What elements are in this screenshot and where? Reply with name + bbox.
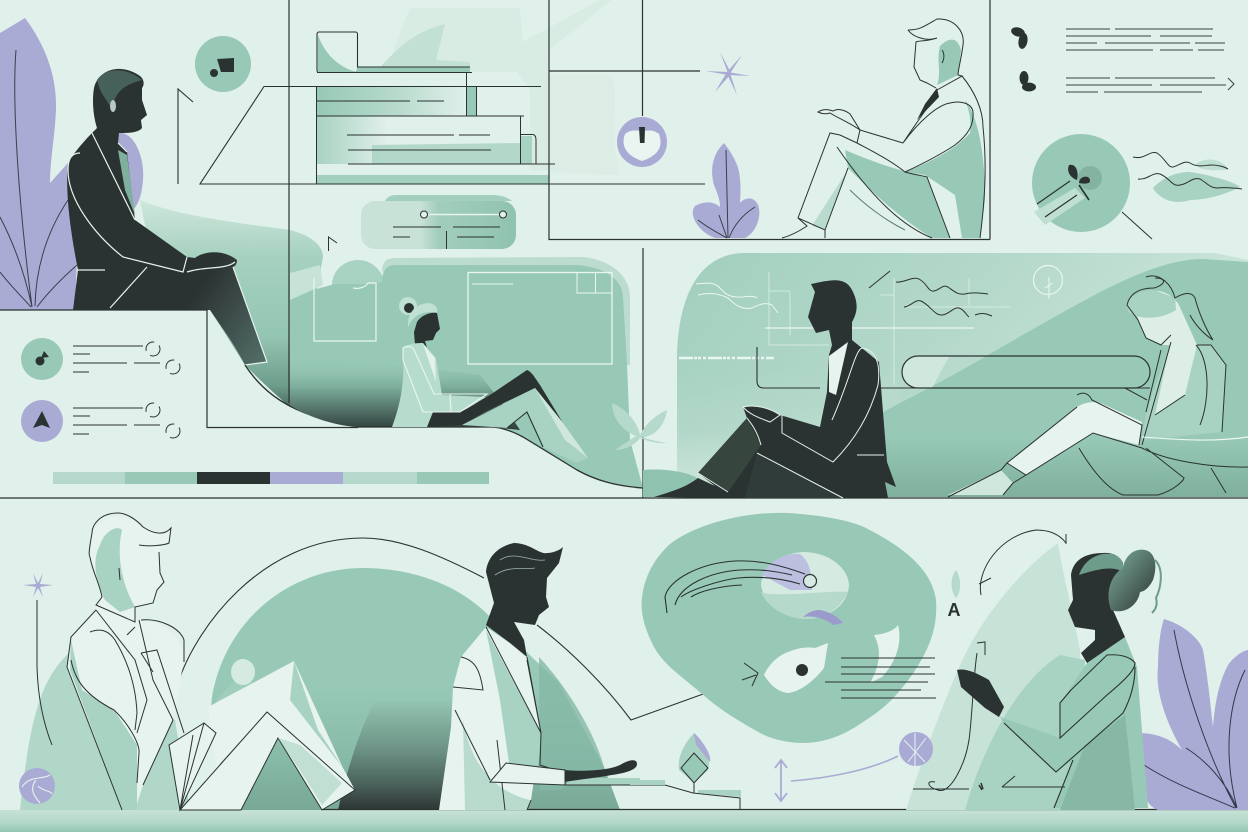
- panel: list rows: [21, 338, 489, 484]
- figure: light man sitting with book: [67, 513, 355, 810]
- icon: lavender plant left: [0, 18, 143, 310]
- wash right of man: [539, 657, 604, 790]
- panel: top right seated man: [782, 19, 985, 238]
- ground curve: [357, 427, 643, 488]
- small dots: [979, 783, 983, 790]
- necktie: [917, 88, 939, 120]
- brushed mint slope: [140, 200, 358, 427]
- colour strip: [53, 472, 489, 484]
- figure: woman sitting: [392, 297, 588, 463]
- icon: mint dot with dark glyph: [195, 36, 251, 92]
- phone arrow line: [913, 642, 1065, 791]
- white waves: [696, 283, 778, 313]
- panel: stacked diagram top centre: [0, 0, 1248, 498]
- figure outline: [782, 19, 985, 238]
- figure: dark seated man: [67, 69, 267, 365]
- letter mark: A: [948, 600, 960, 620]
- figure: woman reading: [948, 276, 1248, 497]
- neck shading: [937, 40, 961, 85]
- icon: star: [706, 52, 750, 95]
- outer arch: [382, 257, 630, 365]
- small flame: [952, 570, 960, 598]
- mint hill: [290, 265, 643, 488]
- dotted signal: [679, 357, 774, 359]
- icon: pendant clock: [617, 117, 667, 167]
- screen panel: [468, 272, 612, 364]
- row two: [21, 400, 180, 442]
- cloud: [332, 260, 384, 300]
- ear mark: [942, 50, 944, 63]
- comet lines: [665, 561, 805, 613]
- dark shadow lower left: [290, 358, 520, 430]
- ground curve: [245, 365, 358, 427]
- panel: top right notes: [1010, 26, 1242, 239]
- dark pool: [338, 700, 470, 810]
- wash stroke: [380, 24, 470, 72]
- text lines: [825, 658, 936, 698]
- icon: compass circle: [1034, 266, 1062, 299]
- left bottom wash: [643, 469, 700, 497]
- panel: bottom centre arc circle: [178, 538, 742, 810]
- base line: [322, 808, 1248, 810]
- brushed wash: [385, 8, 525, 72]
- platform tops: [630, 780, 741, 797]
- row one: [21, 338, 180, 380]
- brushed wash: [906, 543, 1080, 810]
- figure: man in white jacket: [439, 543, 640, 810]
- blob left: [677, 253, 1248, 497]
- mint wash near body: [965, 655, 1085, 810]
- jacket mint shading: [905, 100, 985, 238]
- blob lower fade: [677, 370, 900, 497]
- brush wash: [20, 653, 190, 810]
- lighter edge at left: [290, 265, 323, 300]
- panel: top left seated man: [0, 18, 358, 428]
- icon: mint disc with sprout: [1032, 134, 1152, 239]
- low platform: [565, 785, 740, 810]
- eye shape: [742, 643, 828, 693]
- white flame: [870, 625, 899, 683]
- corner tick: [178, 89, 193, 184]
- icon: dark leaf two: [1020, 71, 1036, 92]
- left window frame: [314, 278, 376, 341]
- big mint circle: [211, 568, 620, 810]
- thigh shading: [845, 150, 950, 238]
- grid lines: [0, 0, 1248, 498]
- icon: star on stem: [23, 573, 53, 745]
- shin shading: [812, 170, 848, 230]
- box ledge: [0, 310, 358, 428]
- wash below cross line: [549, 75, 620, 175]
- moon sphere: [761, 552, 849, 619]
- blob: [642, 513, 936, 743]
- arc line: [178, 538, 742, 720]
- perspective outline: [200, 86, 705, 184]
- long pill: [757, 347, 1150, 388]
- lavender brow: [803, 610, 843, 625]
- icon: dark leaf one: [1010, 26, 1029, 50]
- icon: lavender plant right: [1138, 619, 1248, 810]
- note lines: [1066, 29, 1234, 92]
- figure: dark man seated: [654, 280, 896, 498]
- panel: bottom left man outline: [19, 513, 355, 810]
- wash band right: [517, 0, 612, 170]
- hill right: [880, 259, 1248, 497]
- floor strip: [0, 810, 1248, 832]
- fine sketch lines: [769, 272, 1010, 385]
- leaf sprig: [612, 403, 667, 450]
- icon: lavender plant: [693, 143, 759, 238]
- curved arrow: [979, 530, 1066, 595]
- panel: centre hill with seated woman: [290, 257, 667, 488]
- top tab: [317, 32, 358, 72]
- icon: gem on stand: [679, 733, 710, 793]
- cursor mark: [328, 237, 337, 251]
- bright horizontal: [765, 327, 974, 329]
- brush wave: [1133, 152, 1242, 202]
- figure: woman with phone: [957, 550, 1161, 810]
- panel: bottom right woman: [906, 530, 1248, 810]
- panel: middle right blobs: [643, 253, 1248, 498]
- icon: lavender badge: [19, 768, 55, 804]
- panel: bottom mint blob: [642, 513, 936, 743]
- panel: bottom middle man: [439, 543, 741, 810]
- icon: lavender connector: [775, 732, 933, 801]
- dark waves: [869, 271, 992, 317]
- stacked layers: [316, 67, 555, 184]
- slider pill: [361, 195, 516, 249]
